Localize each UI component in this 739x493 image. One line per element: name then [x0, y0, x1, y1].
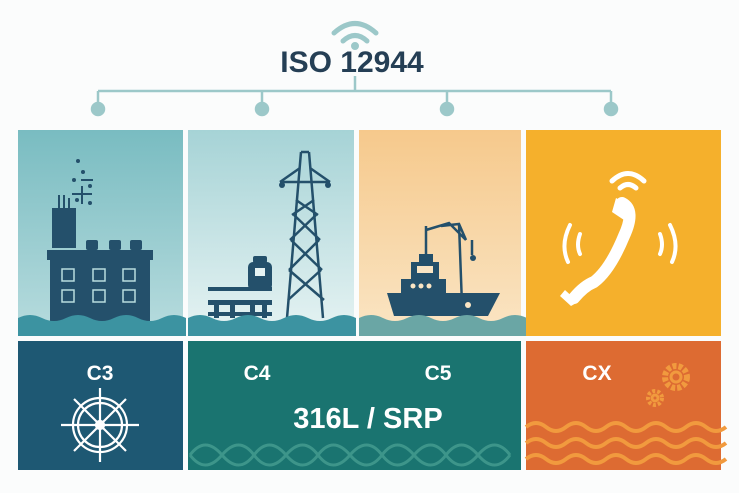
icon: wifi above title [334, 24, 376, 48]
panel: C4 C5 316L/SRP: C5 [425, 362, 452, 385]
panel: C4 C5 316L/SRP: 316L / SRP [293, 403, 443, 435]
panel: CX [526, 341, 726, 470]
panel: ship with crane [359, 130, 527, 336]
panel: building [18, 130, 186, 336]
panel: C3: C3 [87, 362, 113, 385]
icon: ship wheel [61, 388, 139, 462]
title: ISO 12944 [280, 46, 424, 79]
panel: phone [526, 130, 721, 336]
icon: gears [648, 366, 687, 405]
panel: C4 C5 316L/SRP: C4 [244, 362, 271, 385]
icon: phone with signal [564, 174, 676, 298]
waves [526, 423, 726, 463]
panel: CX: CX [582, 362, 612, 385]
panel: tower and platform [188, 130, 356, 336]
panel: C3 [18, 341, 183, 470]
connector tree [92, 76, 617, 115]
panel: C4 C5 316L/SRP [188, 341, 521, 470]
